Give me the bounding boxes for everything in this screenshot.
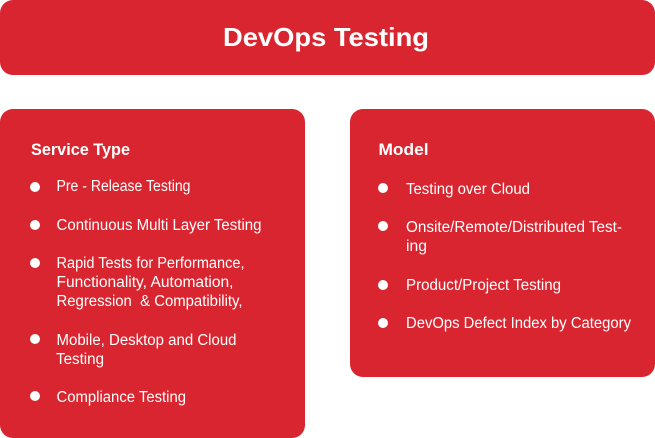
list item: mobile, desktop and cloud testing: Mobile, Desktop and Cloud [56, 332, 236, 349]
list item: devops defect index: DevOps Defect Index by Category [406, 315, 631, 332]
panel: model [350, 109, 655, 377]
list item: pre-release testing: Pre - Release Testing [56, 178, 190, 195]
heading: model: Model [378, 140, 428, 159]
list item: rapid tests [30, 255, 244, 310]
list item: continuous multi layer testing: Continuous Multi Layer Testing [56, 217, 262, 234]
list item: rapid tests: Rapid Tests for Performance, [56, 255, 244, 272]
title banner [0, 0, 655, 75]
list item: onsite/remote/distributed testing: Onsite/Remote/Distributed Test- [406, 219, 622, 236]
list item: testing over cloud: Testing over Cloud [406, 181, 530, 198]
list item: mobile, desktop and cloud testing: Testing [56, 351, 104, 368]
panel: service type [0, 109, 305, 438]
list item: rapid tests: Regression & Compatibility, [56, 293, 242, 310]
heading: service type: Service Type [31, 140, 130, 159]
list item: mobile, desktop and cloud testing [30, 332, 236, 368]
list item: rapid tests: Functionality, Automation, [56, 274, 234, 291]
list item: onsite/remote/distributed testing: ing [406, 238, 427, 255]
list item: onsite/remote/distributed testing [378, 219, 622, 255]
list item: product/project testing: Product/Project Testing [406, 277, 561, 294]
title: DevOps Testing [223, 22, 429, 52]
list item: compliance testing: Compliance Testing [56, 389, 186, 406]
